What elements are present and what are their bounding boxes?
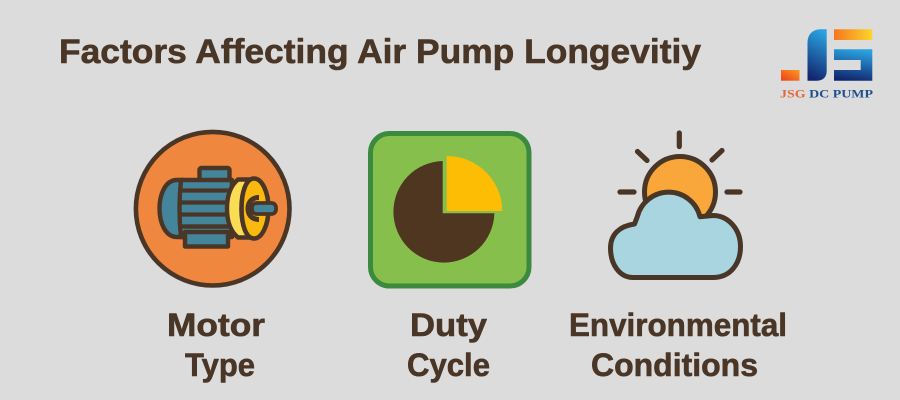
label: Environmental Conditions — [569, 307, 787, 383]
icon: duty cycle pie chart — [370, 134, 529, 286]
label: Duty Cycle: Duty — [410, 307, 487, 343]
label: Motor Type: Type — [185, 347, 255, 383]
label: Environmental Conditions: Environmental — [569, 307, 787, 343]
icon: sun behind cloud — [610, 133, 740, 278]
label: Duty Cycle — [407, 307, 490, 383]
label: Duty Cycle: Cycle — [407, 347, 490, 383]
title: Factors Affecting Air Pump Longevitiy — [59, 33, 701, 71]
label: Motor Type: Motor — [167, 307, 265, 343]
label: Environmental Conditions: Conditions — [591, 347, 758, 383]
logo: JSG DC PUMP — [780, 29, 873, 100]
label: Motor Type — [167, 307, 265, 383]
logo: JSG DC PUMP: JSG DC PUMP — [780, 88, 873, 100]
icon: motor — [136, 132, 290, 286]
